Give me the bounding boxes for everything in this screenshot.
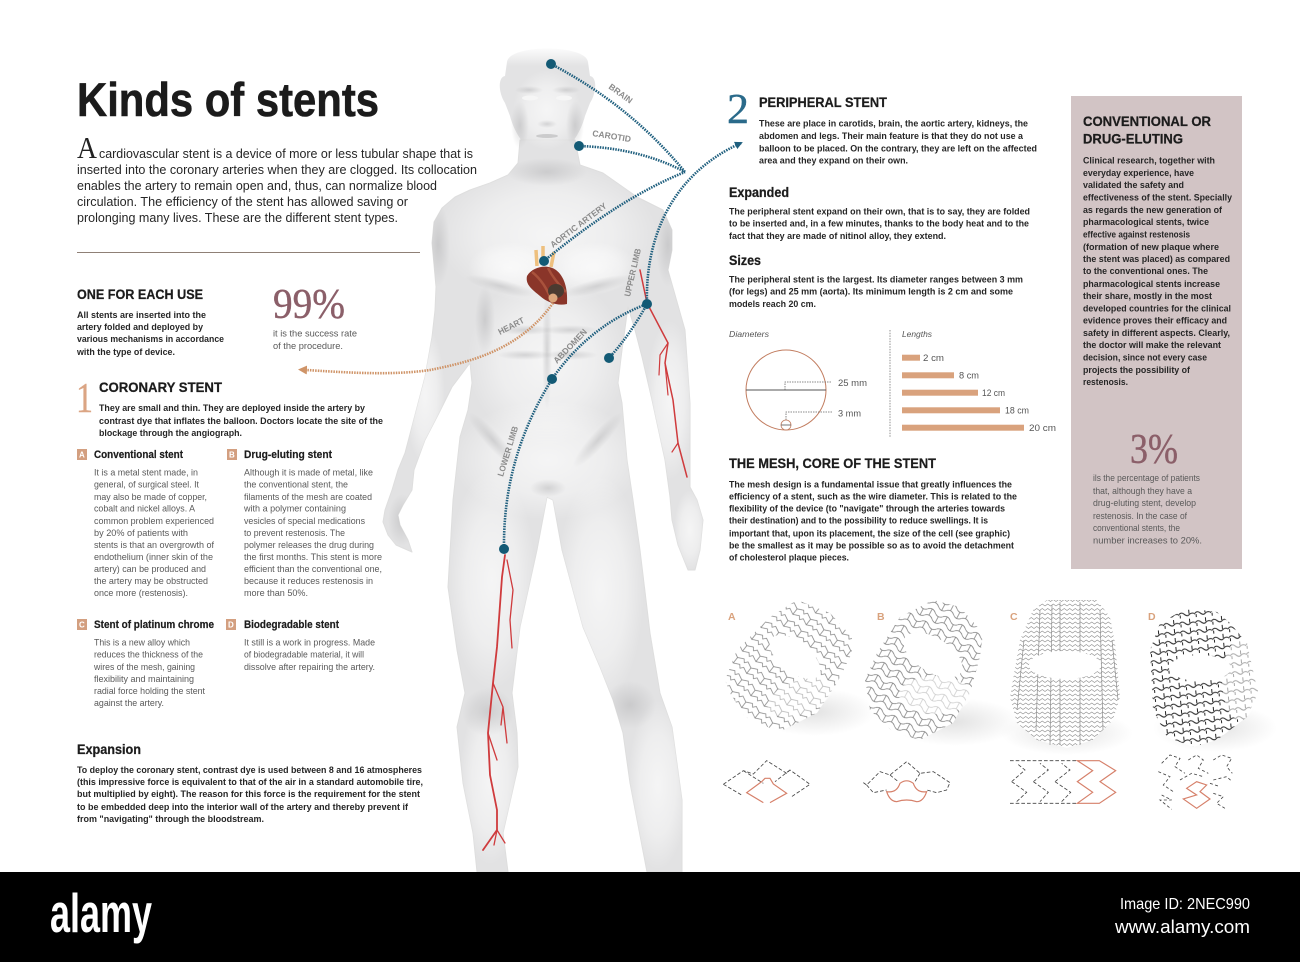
stent type A: conventional: It is a metal stent made, in [94, 466, 198, 478]
intro paragraph: inserted into the coronary arteries when they are clogged. Its collocation [77, 162, 477, 177]
section 2: peripheral stent: balloon to be placed. On the contrary, they are left on the affected [759, 144, 1037, 154]
body shading [388, 158, 706, 870]
text block: sizes: Sizes [729, 253, 761, 268]
connectors: peripheral stent sites to section 2 [504, 64, 741, 549]
panel heading: DRUG-ELUTING [1083, 132, 1183, 146]
section 1: coronary stent: 1 [76, 376, 93, 422]
intro paragraph: cardiovascular stent is a device of more or less tubular shape that is [99, 146, 473, 161]
heart illustration [527, 246, 567, 305]
panel body text: projects the possibility of [1083, 365, 1191, 375]
diagram: stent diameters: 25 mm [838, 378, 867, 389]
footer url: www.alamy.com [1114, 917, 1250, 937]
stat description: number increases to 20%. [1093, 534, 1202, 546]
stent type C: platinum chrome: against the artery. [94, 697, 164, 708]
text block: the mesh, core of the stent: flexibility of the device (to "navigate" through the arteries towards [729, 504, 1005, 514]
text block: expanded [729, 185, 1030, 241]
stent type A: conventional [77, 449, 214, 598]
panel body text: to the conventional ones. The [1083, 266, 1208, 276]
torso, arms and legs [383, 140, 703, 872]
text block: the mesh, core of the stent: important that, upon its placement, the size of the cell (see graphic) [729, 528, 1010, 538]
section 2: peripheral stent: abdomen and legs. Their main feature is that they do not use a [759, 131, 1024, 141]
panel heading: CONVENTIONAL OR [1083, 114, 1211, 129]
stent illustration A: A [728, 611, 736, 623]
panel body text: validated the safety and [1083, 180, 1184, 190]
stent type B: drug-eluting: Although it is made of metal, like [244, 466, 373, 478]
text block: the mesh, core of the stent: be the smallest as it may be possible so as to avoid the detachment [729, 540, 1014, 550]
bar chart: stent lengths: 2 cm [923, 353, 944, 364]
text block: the mesh, core of the stent: THE MESH, CORE OF THE STENT [729, 456, 937, 471]
cell pattern C [1010, 761, 1116, 803]
stat: 99% success rate: it is the success rate [273, 328, 357, 338]
footer bar [0, 872, 1300, 962]
title: Kinds of stents [77, 73, 379, 126]
connector node dots [499, 59, 652, 554]
intro paragraph: prolonging many lives. These are the different stent types. [77, 210, 398, 225]
panel body text: Clinical research, together with [1083, 156, 1215, 166]
intro paragraph: enables the artery to remain open and, thus, can normalize blood [77, 178, 437, 193]
bar chart: stent lengths: 20 cm [1029, 423, 1056, 434]
bar chart: stent lengths: 18 cm [1005, 406, 1029, 417]
footer image id: Image ID: 2NEC990 [1120, 896, 1250, 913]
text block: expanded: The peripheral stent expand on their own, that is to say, they are folded [729, 206, 1030, 216]
diagram: stent diameters: 3 mm [838, 408, 861, 420]
text block: sizes: models reach 20 cm. [729, 299, 816, 309]
stent illustration C: C [1010, 611, 1018, 623]
text block: one for each use: with the type of device. [76, 347, 175, 357]
stent type A: conventional: general, of surgical steel. It [94, 478, 199, 490]
text block: sizes: (for legs) and 25 mm (aorta). Its minimum length is 2 cm and some [729, 286, 1013, 296]
stent type C: platinum chrome: This is a new alloy which [94, 636, 190, 648]
body site labels: AORTIC ARTERY [548, 201, 609, 250]
stent type C: platinum chrome: radial force holding the stent [94, 685, 205, 696]
text block: one for each use: artery folded and deployed by [77, 322, 204, 332]
stent illustration C [1001, 600, 1133, 755]
head [500, 48, 595, 158]
stent type C: platinum chrome: wires of the mesh, gaining [93, 661, 195, 672]
text block: one for each use [76, 287, 224, 357]
stent type B: drug-eluting: Drug-eluting stent [244, 449, 332, 461]
body site labels: HEART [496, 315, 526, 337]
stent illustration D [1148, 608, 1277, 752]
cell pattern B [863, 762, 950, 802]
section 1: coronary stent: contrast dye that inflates the balloon. Doctors locate the site of the [99, 416, 383, 426]
stent type D: biodegradable: It still is a work in progress. Made [244, 636, 375, 648]
text block: expanded: fact that they are made of nitinol alloy, they extend. [729, 231, 946, 241]
panel body text: evidence proves their efficacy and [1083, 316, 1227, 326]
stent type A: conventional: endothelium (inner skin of the [94, 551, 213, 562]
panel heading [1083, 114, 1211, 146]
panel body text: everyday experience, have [1083, 168, 1194, 178]
panel body text: effective against restenosis [1083, 230, 1190, 240]
body site labels: LOWER LIMB [495, 425, 520, 478]
text block: one for each use: All stents are inserted into the [77, 310, 206, 320]
panel body text: the doctor will make the relevant [1083, 340, 1221, 350]
stent illustration B [865, 600, 1020, 746]
human body figure [383, 48, 706, 872]
body site labels [495, 82, 643, 478]
stent type C: platinum chrome: Stent of platinum chrome [94, 619, 214, 631]
stent type A: conventional: artery) can be produced and [94, 563, 206, 574]
stat description: ils the percentage of patients [1093, 472, 1200, 483]
body site labels: ABDOMEN [551, 327, 589, 365]
panel body text: effectiveness of the stent. Specially [1083, 192, 1233, 202]
stat description [1093, 472, 1202, 546]
text block: sizes: The peripheral stent is the largest. Its diameter ranges between 3 mm [729, 274, 1023, 284]
cell pattern A [723, 761, 810, 803]
panel: conventional or drug-eluting [1071, 96, 1242, 569]
stent type B: drug-eluting: more than 50%. [244, 587, 308, 598]
text block: expansion: from "navigating" through the bloodstream. [77, 814, 264, 824]
text block: expansion: Expansion [77, 742, 141, 757]
text block: expanded: Expanded [729, 185, 789, 200]
text block: the mesh, core of the stent: of cholesterol plaque pieces. [729, 552, 849, 562]
text block: expansion: but multiplied by eight). The reason for this force is the requirement for the stent [77, 789, 420, 799]
section 1: coronary stent: blockage through the angiograph. [99, 428, 242, 438]
stent type A: conventional: Conventional stent [94, 449, 183, 461]
text block: the mesh, core of the stent: efficiency of a stent, such as the wire diameter. This is related to the [729, 492, 1017, 502]
panel body text: pharmacological stents, twice [1083, 217, 1209, 227]
panel body text: the stent was placed) as compared [1083, 254, 1230, 264]
stent type D: biodegradable [226, 619, 375, 672]
panel body text: as regards the new generation of [1083, 205, 1223, 215]
stent type A: conventional: stents is that an overgrowth of [94, 539, 214, 550]
bar chart: stent lengths: 8 cm [959, 371, 979, 382]
cell pattern D [1158, 755, 1232, 809]
stent type D: biodegradable: of biodegradable material, it will [244, 648, 364, 660]
stent type C: platinum chrome: C [79, 620, 85, 630]
vessels above heart [536, 246, 554, 267]
stent illustration D: D [1148, 611, 1156, 623]
footer logo: alamy [50, 882, 152, 944]
stent type B: drug-eluting: efficient than the conventional one, [244, 563, 382, 574]
stent type D: biodegradable: dissolve after repairing the artery. [244, 661, 375, 672]
text block: the mesh, core of the stent [729, 456, 1017, 562]
body site labels: CAROTID [592, 128, 632, 144]
panel body text: their share, mostly in the most [1083, 291, 1212, 301]
stent type B: drug-eluting: the conventional stent, the [244, 478, 348, 490]
stent type C: platinum chrome: reduces the thickness of the [94, 648, 203, 660]
section 1: coronary stent: CORONARY STENT [99, 380, 223, 395]
panel body text: pharmacological stents increase [1083, 279, 1220, 289]
stent type D: biodegradable: D [228, 620, 234, 630]
stent type B: drug-eluting [227, 449, 382, 598]
arteries: red vessels in arm and leg [483, 270, 687, 850]
text block: expansion: to be embedded deep into the interior wall of the artery and thereby prevent if [77, 802, 409, 812]
stat: 99% success rate: 99% [273, 282, 345, 328]
heart body [527, 267, 567, 305]
bar chart: stent lengths: Lengths [902, 329, 933, 339]
face features [511, 70, 584, 150]
body site labels: BRAIN [607, 82, 635, 105]
section 2: peripheral stent: 2 [727, 87, 749, 133]
stat description: that, although they have a [1093, 485, 1193, 496]
panel body text [1083, 156, 1233, 387]
text block: one for each use: ONE FOR EACH USE [77, 287, 203, 302]
text block: expanded: to be inserted and, in a few minutes, thanks to the body heat and to the [729, 218, 1029, 228]
stent type A: conventional: may also be made of copper, [94, 491, 207, 502]
stat: 99% success rate: of the procedure. [273, 340, 343, 351]
text block: the mesh, core of the stent: The mesh design is a fundamental issue that greatly influences the [729, 480, 1012, 490]
stent illustration A [725, 600, 875, 736]
stent type B: drug-eluting: the first months. This stent is more [244, 551, 382, 562]
stent type A: conventional: cobalt and nickel alloys. A [94, 502, 196, 514]
stent type D: biodegradable: Biodegradable stent [244, 619, 339, 631]
stent type A: conventional: A [79, 450, 85, 460]
section 1: coronary stent: They are small and thin. They are deployed inside the artery by [99, 403, 366, 413]
stent type B: drug-eluting: polymer releases the drug during [244, 539, 374, 550]
stent type B: drug-eluting: with a polymer containing [243, 502, 346, 514]
intro paragraph: circulation. The efficiency of the stent has allowed saving or [77, 194, 409, 209]
stent illustration B: B [877, 611, 885, 623]
bar chart: stent lengths [902, 329, 1056, 434]
stent type A: conventional: by 20% of patients with [94, 527, 188, 538]
intro paragraph: A [77, 130, 98, 165]
panel body text: decision, since not every case [1083, 352, 1207, 362]
body site labels: UPPER LIMB [622, 247, 643, 297]
text block: expansion: (this impressive force is equivalent to that of the air in a standard automobile tire, [77, 777, 423, 787]
stent type B: drug-eluting: B [229, 450, 235, 460]
stent type A: conventional: common problem experienced [94, 515, 214, 526]
stat description: drug-eluting stent, develop [1093, 497, 1196, 508]
text block: expansion: To deploy the coronary stent, contrast dye is used between 8 and 16 atmospheres [77, 765, 422, 775]
panel body text: (formation of new plaque where [1083, 242, 1219, 252]
text block: expansion [77, 742, 423, 824]
panel body text: developed countries for the clinical [1083, 304, 1231, 314]
bar chart: stent lengths: 12 cm [982, 388, 1005, 399]
stent type A: conventional: once more (restenosis). [94, 587, 188, 598]
section 2: peripheral stent: PERIPHERAL STENT [759, 95, 888, 110]
diagram: stent diameters [729, 329, 867, 430]
intro paragraph [77, 130, 477, 225]
stat: 99% success rate [273, 282, 357, 351]
stent type A: conventional: the artery may be obstructed [94, 575, 208, 586]
stat description: conventional stents, the [1093, 522, 1180, 533]
text block: the mesh, core of the stent: their destination) and to the possibility to reduce swellings. It is [729, 516, 988, 526]
stent type B: drug-eluting: because it reduces restenosis in [244, 575, 373, 586]
section 1: coronary stent [76, 376, 383, 438]
section 2: peripheral stent: area and they expand on their own. [759, 156, 908, 166]
section 2: peripheral stent [727, 87, 1037, 166]
stent type B: drug-eluting: to prevent restenosis. The [244, 527, 345, 538]
stat description: restenosis. In the case of [1093, 510, 1187, 521]
stat: 3%: 3% [1130, 427, 1178, 473]
panel body text: safety in different aspects. Clearly, [1083, 328, 1230, 338]
stent type C: platinum chrome: flexibility and maintaining [94, 673, 194, 684]
section 2: peripheral stent: These are place in carotids, brain, the aortic artery, kidneys, the [759, 118, 1028, 128]
stent type B: drug-eluting: vesicles of special medications [244, 515, 365, 526]
text block: sizes [729, 253, 1023, 309]
panel body text: restenosis. [1083, 377, 1128, 387]
stent type C: platinum chrome [77, 619, 214, 708]
stent type B: drug-eluting: filaments of the mesh are coated [244, 491, 372, 502]
diagram: stent diameters: Diameters [729, 329, 770, 339]
text block: one for each use: various mechanisms in accordance [77, 334, 224, 344]
connector: heart to coronary stent arrow [306, 303, 553, 373]
